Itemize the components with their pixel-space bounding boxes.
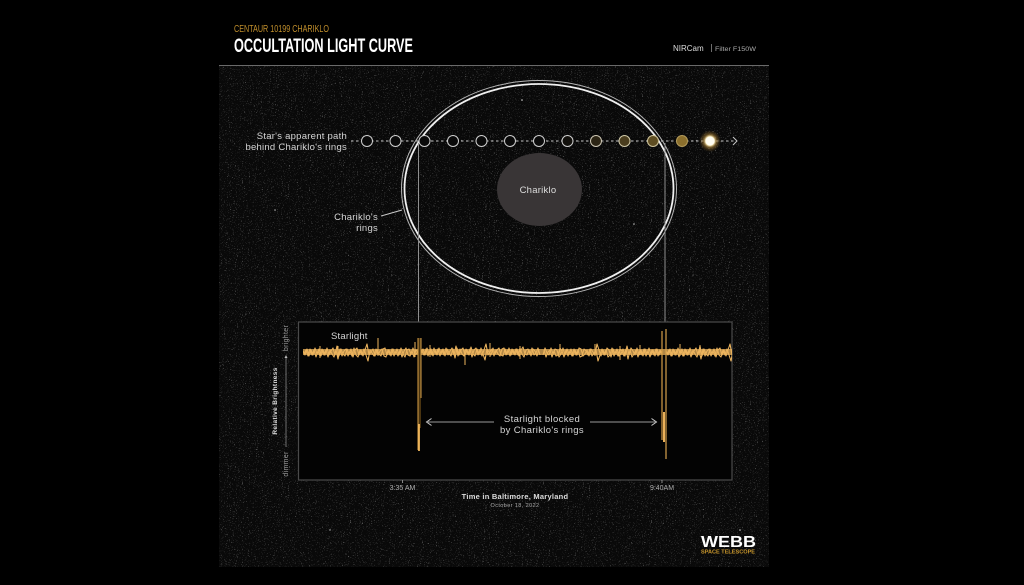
x axis title: Time in Baltimore, Maryland <box>462 492 568 501</box>
label: star path <box>245 131 347 153</box>
label: rings: rings <box>356 223 378 234</box>
instrument label: Filter F150W <box>715 47 756 53</box>
Chariklo body: Chariklo <box>520 185 556 196</box>
y axis label: Relative Brightness <box>272 367 279 435</box>
y axis label: brighter <box>283 325 290 351</box>
title: OCCULTATION LIGHT CURVE <box>234 36 413 57</box>
x axis tick labels: 3:35 AM <box>390 485 416 492</box>
label: starlight blocked: Starlight blocked <box>504 414 580 425</box>
label: starlight blocked <box>494 412 590 437</box>
Webb logo: SPACE TELESCOPE <box>701 550 756 556</box>
infographic <box>219 25 769 567</box>
label: starlight: Starlight <box>331 331 368 342</box>
chart panel <box>298 322 732 483</box>
Webb logo: WEBB <box>701 534 756 551</box>
Chariklo body <box>497 153 582 226</box>
light curve <box>303 338 732 365</box>
label: star path: Star's apparent path <box>257 131 347 142</box>
projection lines <box>418 143 665 340</box>
star positions <box>362 136 688 146</box>
star <box>699 130 721 152</box>
x axis tick labels <box>390 485 674 492</box>
label: star path: behind Chariklo's rings <box>245 142 347 153</box>
star path dashed line with arrow <box>351 137 737 145</box>
occultation dip left <box>418 338 421 451</box>
header rule <box>219 65 769 66</box>
y axis label: dimmer <box>283 451 290 477</box>
star field panel <box>219 66 769 567</box>
instrument label: NIRCam <box>673 44 704 53</box>
blocked arrow <box>426 418 656 426</box>
Chariklo's rings <box>402 80 676 296</box>
x axis title: October 18, 2022 <box>491 503 539 509</box>
instrument label <box>673 44 756 53</box>
y axis label <box>272 325 290 477</box>
eyebrow heading: CENTAUR 10199 CHARIKLO <box>234 24 329 35</box>
x axis tick labels: 9:40AM <box>650 485 674 492</box>
label: rings <box>334 210 402 234</box>
x axis title <box>462 492 568 509</box>
label: starlight blocked: by Chariklo's rings <box>500 425 584 436</box>
occultation dip right <box>662 329 666 459</box>
label: rings: Chariklo's <box>334 212 378 223</box>
